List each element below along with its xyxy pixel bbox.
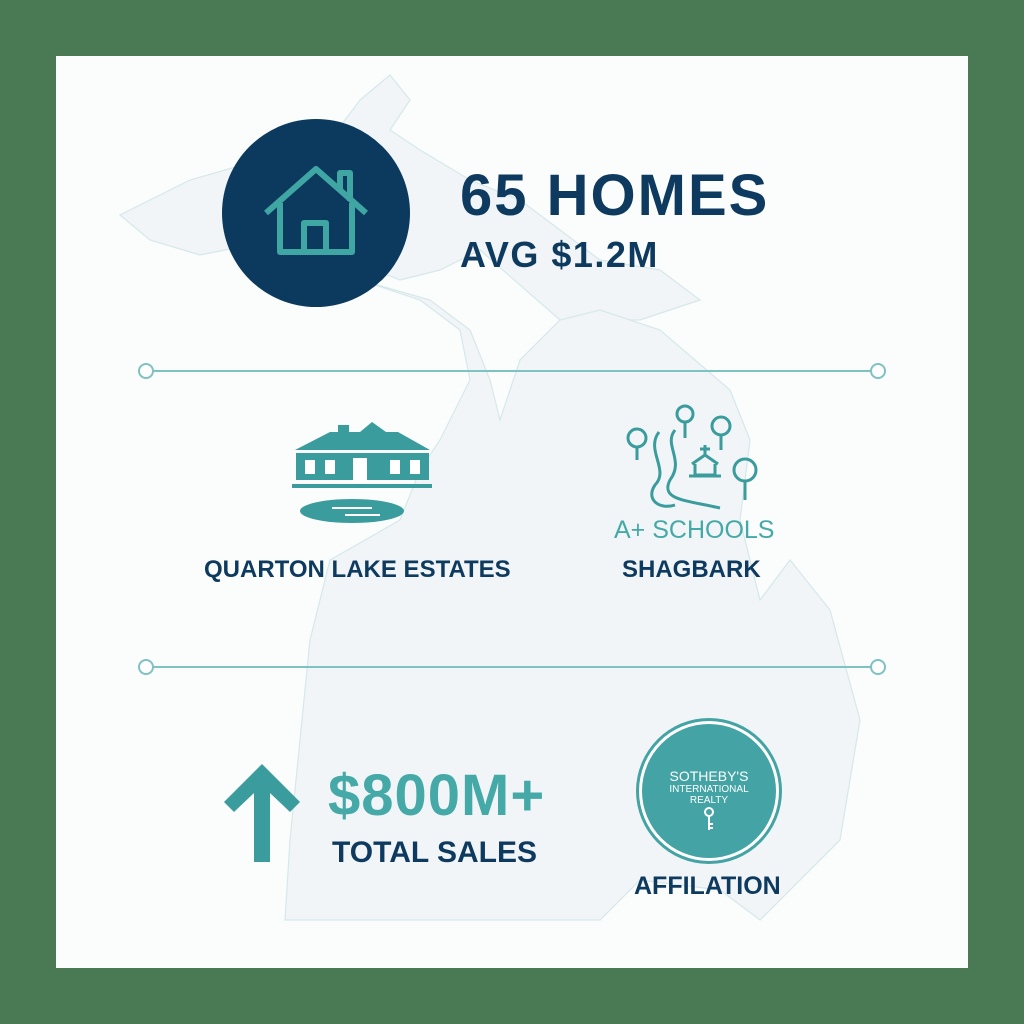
divider 1 [138, 363, 886, 379]
icon: lake estate house [292, 422, 432, 523]
stat: $800M+: $800M+ [328, 763, 545, 828]
label: total sales: TOTAL SALES [332, 836, 537, 869]
badge: Sotheby's: REALTY [690, 795, 728, 806]
icon: navy circle with house [222, 119, 410, 307]
label: Shagbark: SHAGBARK [622, 556, 761, 583]
label: affiliation: AFFILATION [634, 872, 781, 900]
badge: Sotheby's: SOTHEBY'S [670, 768, 748, 784]
label: A+ schools: A+ SCHOOLS [614, 516, 774, 544]
heading: 65 homes: 65 HOMES [460, 163, 769, 228]
badge: Sotheby's [642, 724, 776, 858]
label: Quarton Lake Estates: QUARTON LAKE ESTATES [204, 556, 511, 583]
subheading: avg price: AVG $1.2M [460, 234, 659, 275]
badge: Sotheby's: INTERNATIONAL [669, 784, 749, 795]
panel: main white card [56, 56, 968, 968]
divider 2 [138, 659, 886, 675]
icon: winding road, trees and schoolhouse [626, 404, 758, 510]
icon: up arrow [224, 764, 300, 862]
